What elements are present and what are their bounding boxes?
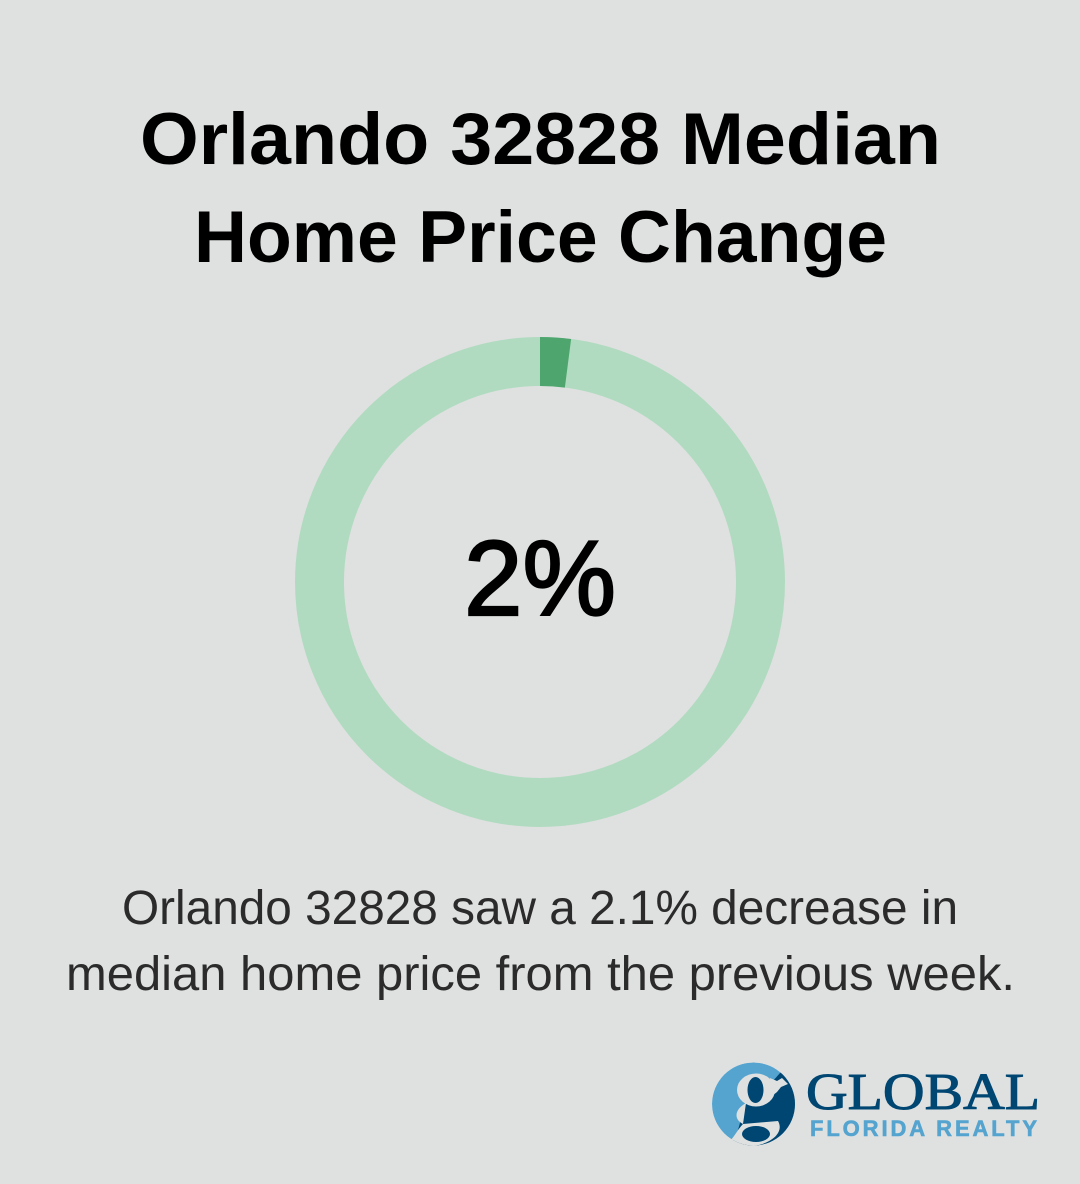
logo wordmark: GLOBAL [806,1064,1040,1121]
infographic canvas [69,111,1038,1146]
logo: Global Florida Realty [712,1060,1040,1150]
logo: Global Florida Realty: FLORIDA REALTY [810,1116,1037,1141]
description text [66,882,1015,1001]
title [140,99,941,278]
donut chart: 2% [320,362,760,802]
donut track [320,362,760,802]
title: Orlando 32828 Median [140,99,941,180]
donut value segment [540,362,568,363]
description text: median home price from the previous week. [66,948,1015,1001]
description text: Orlando 32828 saw a 2.1% decrease in [122,882,958,935]
title: Home Price Change [194,197,887,278]
logo mark [712,1062,795,1146]
center value: 2% [464,518,616,638]
